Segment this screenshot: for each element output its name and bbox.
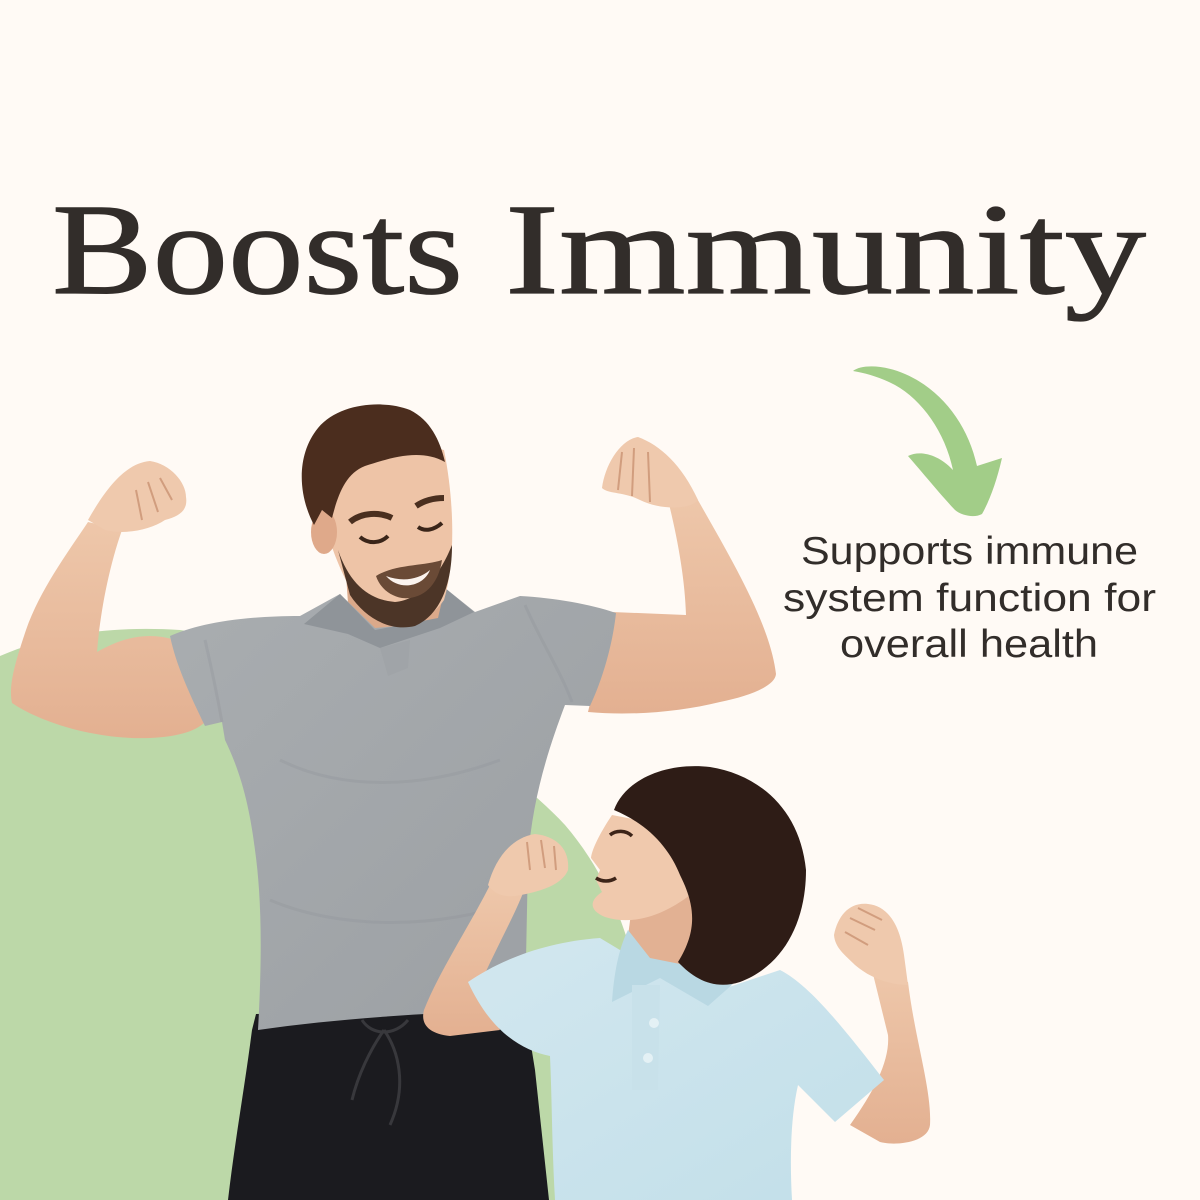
smile bbox=[386, 570, 430, 585]
boy neck bbox=[625, 885, 705, 985]
right arm bbox=[588, 495, 776, 714]
eyes bbox=[360, 523, 442, 542]
boy left arm bbox=[423, 885, 525, 1036]
boy left fist finger lines bbox=[527, 840, 556, 870]
boy left fist bbox=[488, 834, 568, 896]
boy eye and smile bbox=[596, 831, 632, 881]
boy right fist bbox=[834, 904, 908, 985]
icon: curved green arrow bbox=[853, 366, 1002, 516]
boy right fist finger lines bbox=[845, 908, 882, 945]
drawstring bbox=[352, 1020, 408, 1125]
boy placket and buttons bbox=[632, 985, 660, 1090]
caption text bbox=[783, 530, 1156, 666]
figure: man flexing bbox=[11, 404, 776, 1200]
hair bbox=[302, 404, 445, 525]
green background shape bbox=[0, 629, 628, 1200]
shirt collar and placket bbox=[304, 588, 474, 648]
eyebrows bbox=[350, 498, 444, 522]
boy collar bbox=[612, 930, 742, 1006]
boy face bbox=[591, 815, 690, 920]
ear bbox=[311, 510, 337, 554]
title: Immunity bbox=[505, 178, 1146, 322]
face bbox=[322, 446, 452, 623]
shirt folds bbox=[205, 605, 572, 922]
right fist bbox=[602, 437, 698, 508]
caption text: system function for bbox=[783, 577, 1156, 620]
boy raised right arm bbox=[850, 970, 930, 1144]
title: Boosts bbox=[52, 178, 463, 322]
caption text: overall health bbox=[840, 623, 1098, 666]
figure: boy flexing bbox=[423, 766, 930, 1200]
left fist finger lines bbox=[136, 478, 172, 520]
caption text: Supports immune bbox=[801, 530, 1138, 573]
boy light blue polo bbox=[468, 938, 884, 1200]
beard bbox=[338, 545, 452, 627]
left arm bbox=[11, 522, 205, 738]
title bbox=[52, 178, 1146, 322]
boy hair bbox=[614, 766, 806, 985]
grey t-shirt bbox=[170, 588, 616, 1030]
neck bbox=[345, 560, 448, 632]
shorts bbox=[228, 1008, 549, 1200]
right fist finger lines bbox=[618, 448, 650, 502]
left fist bbox=[88, 461, 186, 532]
